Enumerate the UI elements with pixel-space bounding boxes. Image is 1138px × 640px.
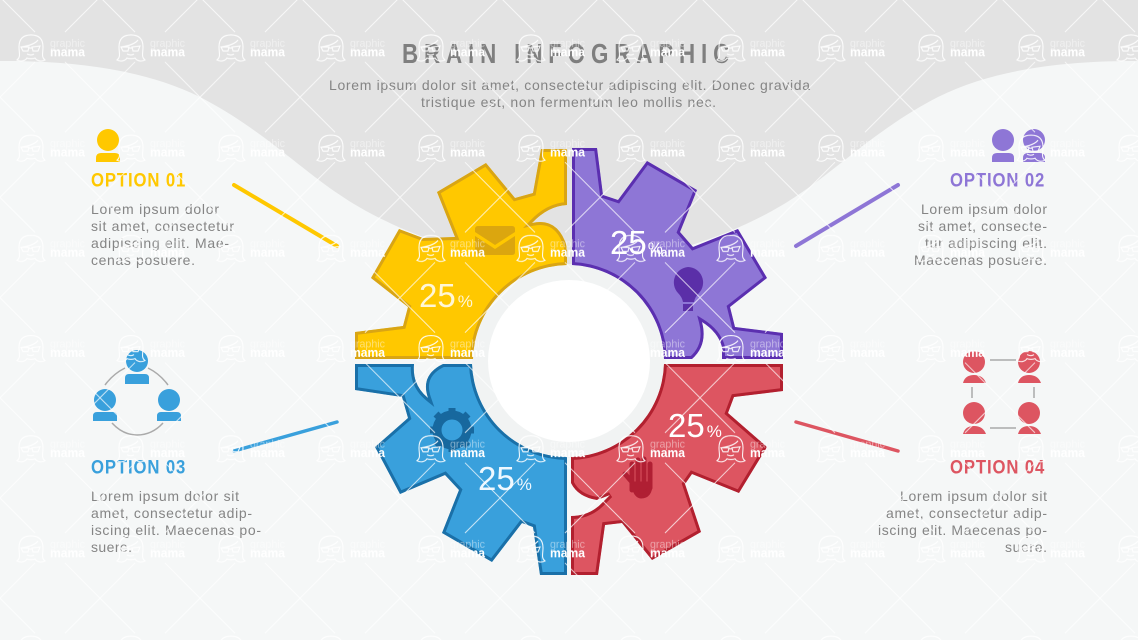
gear segment: blue: [355, 364, 567, 575]
icon: light bulb: [674, 267, 703, 311]
grey wave header: [0, 0, 1138, 265]
heading: option 03: OPTION 03: [91, 457, 186, 478]
percent: red: 25%: [668, 407, 722, 444]
arrow: yellow leader: [234, 185, 337, 246]
text: option 01: Lorem ipsum dolor: [91, 201, 219, 217]
text: option 04: amet, consectetur adip-: [886, 505, 1047, 521]
gear segment: yellow: [355, 149, 567, 359]
text: option 04: [878, 488, 1047, 555]
panel: option 03: [91, 350, 337, 555]
panel: option 04: [796, 351, 1047, 555]
text: option 01: cenas posuere.: [91, 252, 195, 268]
text: option 03: suere.: [91, 539, 132, 555]
text: option 02: Lorem ipsum dolor: [921, 201, 1047, 217]
subtitle: Lorem ipsum dolor sit amet, consectetur adipiscing elit. Donec gravida: [329, 77, 810, 93]
text: option 03: [91, 488, 261, 555]
arrow: blue leader: [234, 422, 337, 451]
arrow: red leader: [796, 422, 898, 451]
text: option 02: Maecenas posuere.: [914, 252, 1047, 268]
text: option 04: Lorem ipsum dolor sit: [900, 488, 1047, 504]
icon: person: [96, 129, 120, 162]
central gear: [355, 148, 783, 575]
icon: envelope: [475, 226, 515, 255]
text: option 01: sit amet, consectetur: [91, 218, 234, 234]
percent: purple: 25%: [610, 224, 663, 261]
icon: two people: [992, 129, 1045, 162]
text: option 03: amet, consectetur adip-: [91, 505, 252, 521]
gear segment: red: [571, 364, 783, 575]
text: option 04: suere.: [1005, 539, 1047, 555]
gear segment: purple: [572, 148, 783, 359]
title: BRAIN INFOGRAPHIC: [402, 39, 735, 70]
centre ring: [472, 264, 666, 458]
text: option 04: iscing elit. Maecenas po-: [878, 522, 1047, 538]
heading: option 02: OPTION 02: [950, 170, 1045, 191]
subtitle: [329, 77, 810, 110]
text: option 01: [91, 201, 234, 268]
text: option 03: iscing elit. Maecenas po-: [91, 522, 261, 538]
text: option 02: sit amet, consecte-: [918, 218, 1047, 234]
text: option 02: [914, 201, 1047, 268]
arrow: purple leader: [796, 185, 898, 246]
icon: network of four people: [963, 351, 1041, 434]
panel: option 01: [91, 129, 337, 268]
subtitle: tristique est, non fermentum leo mollis nec.: [421, 94, 716, 110]
icon: hand: [625, 459, 650, 496]
percent: blue: 25%: [478, 460, 532, 497]
icon: cog: [430, 408, 474, 452]
text: option 02: tur adipiscing elit.: [925, 235, 1047, 251]
icon: team cycle: [93, 350, 181, 435]
text: option 03: Lorem ipsum dolor sit: [91, 488, 239, 504]
centre white disc: [488, 280, 650, 442]
percent: yellow: 25%: [419, 277, 473, 314]
text: option 01: adipiscing elit. Mae-: [91, 235, 229, 251]
heading: option 01: OPTION 01: [91, 170, 186, 191]
panel: option 02: [796, 129, 1047, 268]
heading: option 04: OPTION 04: [950, 457, 1045, 478]
